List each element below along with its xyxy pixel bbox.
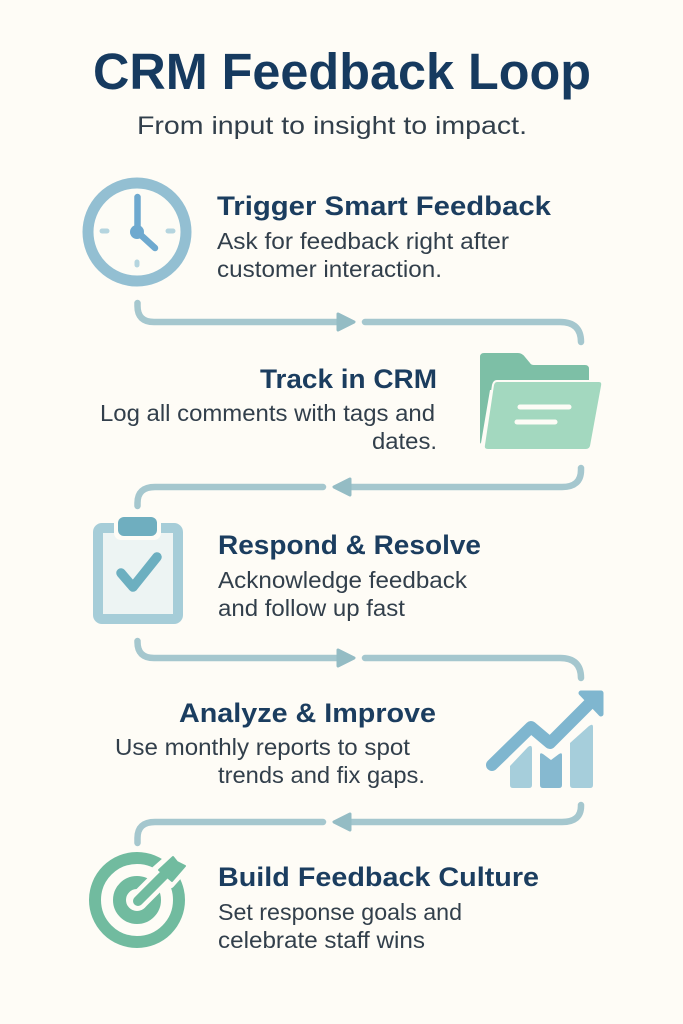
panel: step 3 respond and resolve xyxy=(98,513,481,621)
icon: clock xyxy=(88,183,186,281)
text block xyxy=(218,899,462,953)
text block: dates. xyxy=(372,428,437,454)
title: CRM Feedback Loop xyxy=(93,43,591,100)
text block: Use monthly reports to spot xyxy=(115,734,411,760)
heading: Analyze & Improve xyxy=(179,698,436,728)
text block: Acknowledge feedback xyxy=(218,567,468,593)
panel: step 5 build feedback culture xyxy=(95,856,539,953)
text block xyxy=(217,228,509,282)
text block: Ask for feedback right after xyxy=(217,228,509,254)
text block: Set response goals and xyxy=(218,899,462,925)
heading: Respond & Resolve xyxy=(218,530,481,560)
icon: folder xyxy=(480,353,602,450)
icon: clipboard with check xyxy=(98,513,178,619)
text block: trends and fix gaps. xyxy=(218,762,425,788)
panel: step 4 analyze and improve xyxy=(115,693,601,788)
text block: celebrate staff wins xyxy=(218,927,425,953)
arrow: step 3 to step 4 xyxy=(138,641,581,678)
text block xyxy=(100,400,437,454)
icon: rising chart xyxy=(492,693,601,788)
subtitle: From input to insight to impact. xyxy=(137,112,527,140)
arrow: step 2 to step 3 xyxy=(138,468,581,506)
arrow: step 1 to step 2 xyxy=(138,303,581,342)
text block: and follow up fast xyxy=(218,595,406,621)
panel: step 1 trigger smart feedback xyxy=(88,183,552,282)
panel: step 2 track in CRM xyxy=(100,353,602,454)
heading: Build Feedback Culture xyxy=(218,862,539,892)
icon: target with arrow xyxy=(95,856,186,942)
text block: Log all comments with tags and xyxy=(100,400,435,426)
heading: Trigger Smart Feedback xyxy=(217,191,552,221)
text block xyxy=(218,567,468,621)
heading: Track in CRM xyxy=(260,364,437,394)
text block: customer interaction. xyxy=(217,256,442,282)
text block xyxy=(115,734,425,788)
arrow: step 4 to step 5 xyxy=(138,805,581,843)
